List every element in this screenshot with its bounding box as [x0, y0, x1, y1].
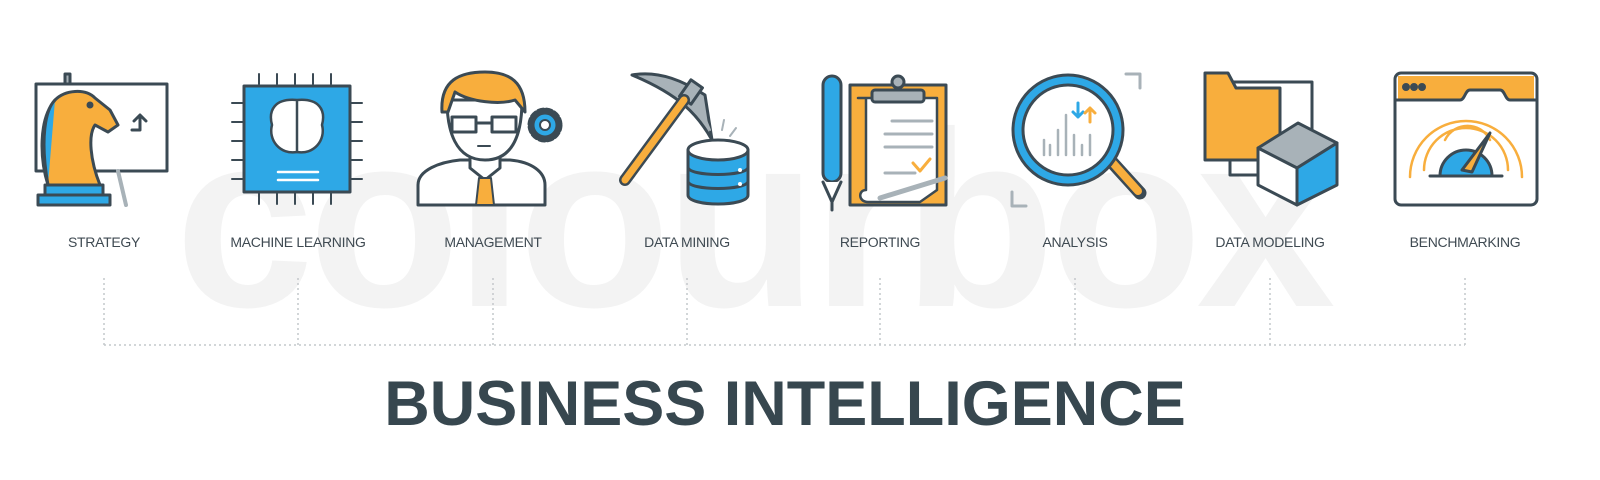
icon: reporting	[823, 76, 946, 210]
text: MANAGEMENT	[444, 234, 542, 250]
icon: management	[418, 72, 560, 205]
text: ANALYSIS	[1042, 234, 1108, 250]
text: DATA MODELING	[1215, 234, 1325, 250]
labels	[68, 234, 1520, 250]
text: BENCHMARKING	[1410, 234, 1520, 250]
icon: analysis	[1012, 74, 1140, 206]
text: STRATEGY	[68, 234, 140, 250]
text: MACHINE LEARNING	[230, 234, 366, 250]
text: REPORTING	[840, 234, 920, 250]
icon: strategy	[36, 74, 167, 205]
watermark: colourbox	[175, 80, 1329, 359]
icon: benchmarking	[1395, 73, 1537, 205]
text: DATA MINING	[644, 234, 730, 250]
icon: data modeling	[1205, 73, 1337, 205]
icon: machine learning	[232, 74, 362, 204]
icon: data mining	[625, 74, 748, 204]
title: BUSINESS INTELLIGENCE	[384, 369, 1186, 439]
